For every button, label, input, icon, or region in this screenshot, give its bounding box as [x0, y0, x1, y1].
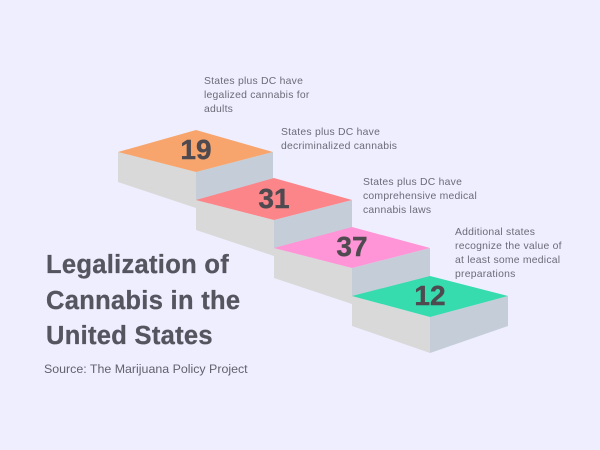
step 1: orange block, 19: 19: [180, 134, 212, 165]
description: decriminalized: States plus DC have: [281, 127, 380, 138]
description: additional states: recognize the value of: [455, 241, 562, 252]
description: legalized: States plus DC have: [204, 76, 303, 87]
step 2: red block, 31: 31: [258, 183, 290, 214]
title: Legalization of: [46, 251, 229, 279]
step 4: green block, 12: [352, 276, 508, 353]
title: Cannabis in the: [46, 287, 240, 315]
description: medical laws: comprehensive medical: [363, 191, 477, 202]
step 3: pink block, 37: 37: [336, 231, 368, 262]
step 2: red block, 31: [196, 178, 352, 256]
step 4: green block, 12: 12: [414, 280, 446, 311]
description: legalized: adults: [204, 104, 233, 115]
title: United States: [46, 322, 213, 350]
step 3: pink block, 37: [274, 227, 430, 304]
description: legalized: legalized cannabis for: [204, 90, 310, 101]
description: additional states: at least some medical: [455, 255, 560, 266]
source: Source: The Marijuana Policy Project: [44, 362, 248, 376]
description: medical laws: States plus DC have: [363, 177, 462, 188]
description: medical laws: cannabis laws: [363, 205, 431, 216]
description: decriminalized: decriminalized cannabis: [281, 141, 397, 152]
description: additional states: preparations: [455, 269, 516, 280]
step 1: orange block, 19: [118, 130, 273, 208]
description: additional states: Additional states: [455, 227, 535, 238]
